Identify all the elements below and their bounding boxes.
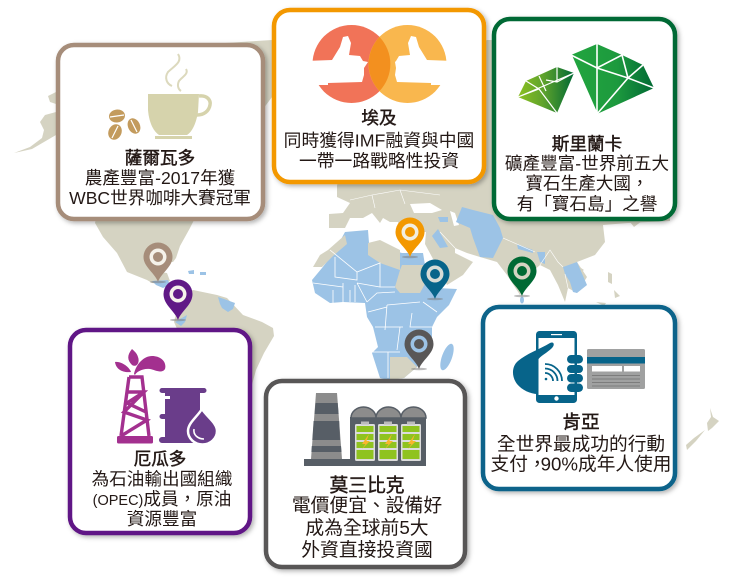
map: libya — [368, 240, 400, 270]
pin: sri lanka — [508, 256, 536, 297]
map: central asian blue countries — [456, 207, 503, 258]
map: east asian islands — [581, 221, 642, 306]
panel: sri lanka — [494, 19, 675, 219]
heading: kenya: 肯亞 — [562, 412, 600, 432]
panel: kenya — [483, 307, 675, 489]
map: north america — [95, 40, 272, 284]
icon: battery plant — [350, 407, 426, 461]
text: mozambique description: 外資直接投資國 — [301, 539, 433, 560]
world map — [14, 40, 719, 450]
icon: bank card — [587, 349, 645, 389]
map: ecuador — [175, 315, 187, 326]
text: mozambique description: 成為全球前5大 — [305, 517, 429, 538]
pin: mozambique — [404, 330, 434, 370]
panel: egypt — [274, 10, 484, 182]
map: new zealand — [686, 408, 719, 450]
text: mozambique description — [292, 494, 442, 560]
text: ecuador description: (OPEC)成員，原油 — [93, 489, 231, 509]
text: ecuador description: 為石油輸出國組織 — [92, 469, 233, 489]
text: mozambique description: 電價便宜、設備好 — [292, 494, 442, 516]
text: el salvador description: 農產豐富-2017年獲 — [85, 168, 236, 188]
text: kenya description: 支付，90%成年人使用 — [491, 454, 671, 474]
map: eurasia — [329, 40, 670, 302]
icon: oil derrick — [115, 349, 165, 444]
map: eurasian borders — [350, 190, 568, 288]
panel: ecuador — [70, 330, 250, 533]
pin: ecuador — [164, 280, 192, 321]
map: caribbean blue islands — [188, 270, 206, 275]
card frame — [58, 45, 263, 219]
icon: two thumbs up — [305, 25, 454, 103]
panel: mozambique — [266, 381, 465, 567]
heading: sri lanka: 斯里蘭卡 — [552, 134, 622, 154]
text: egypt description: 同時獲得IMF融資與中國 — [284, 130, 474, 150]
card frame — [494, 19, 675, 219]
text: egypt description: 一帶一路戰略性投資 — [299, 151, 459, 171]
text: ecuador description — [92, 469, 233, 529]
text: ecuador description: 資源豐富 — [127, 509, 197, 529]
map: guyana and suriname — [218, 297, 235, 312]
icon: large gem — [571, 44, 654, 114]
map: sudan — [395, 265, 427, 293]
icon: phone and hand — [513, 331, 583, 403]
pin: kenya — [420, 260, 450, 300]
heading: egypt: 埃及 — [361, 108, 397, 128]
map: southern africa — [390, 357, 417, 380]
text: kenya description — [491, 434, 671, 474]
pin: egypt — [396, 218, 424, 258]
text: sri lanka description: 寶石生產大國， — [525, 174, 649, 194]
heading: el salvador: 薩爾瓦多 — [125, 148, 195, 168]
icon: coffee beans — [106, 108, 143, 142]
map: alaska — [14, 92, 56, 153]
map: nepal and bangladesh — [517, 244, 545, 264]
pin: el salvador — [144, 242, 172, 283]
text: sri lanka description: 礦產豐富-世界前五大 — [505, 154, 669, 174]
map: africa — [312, 230, 457, 380]
card frame — [266, 381, 465, 567]
map: central american blue countries — [152, 280, 170, 288]
text: el salvador description: WBC世界咖啡大賽冠軍 — [69, 188, 251, 208]
map: south america — [174, 290, 274, 400]
map: laos and vietnam — [563, 262, 587, 293]
heading: mozambique: 莫三比克 — [329, 474, 405, 496]
panel: el salvador — [58, 45, 263, 219]
text: egypt description — [284, 130, 474, 171]
icon: oil barrel and drop — [159, 388, 217, 444]
map: morocco and western sahara — [313, 235, 347, 267]
text: sri lanka description — [505, 154, 669, 214]
text: kenya description: 全世界最成功的行動 — [497, 434, 665, 454]
icon: chimney — [304, 393, 426, 466]
icon: coffee cup — [148, 54, 210, 139]
map: black and caspian seas — [410, 203, 459, 226]
card frame — [274, 10, 484, 182]
heading: ecuador: 厄瓜多 — [134, 449, 186, 469]
text: sri lanka description: 有「寶石島」之譽 — [517, 194, 658, 214]
map: iraq and caucasus — [432, 217, 448, 248]
icon: small gem — [518, 67, 574, 113]
card frame — [483, 307, 675, 489]
map: madagascar — [438, 342, 456, 372]
card frame — [70, 330, 250, 533]
text: el salvador description — [69, 168, 251, 208]
map: african borders — [313, 250, 437, 378]
map: sri lanka — [520, 296, 524, 304]
